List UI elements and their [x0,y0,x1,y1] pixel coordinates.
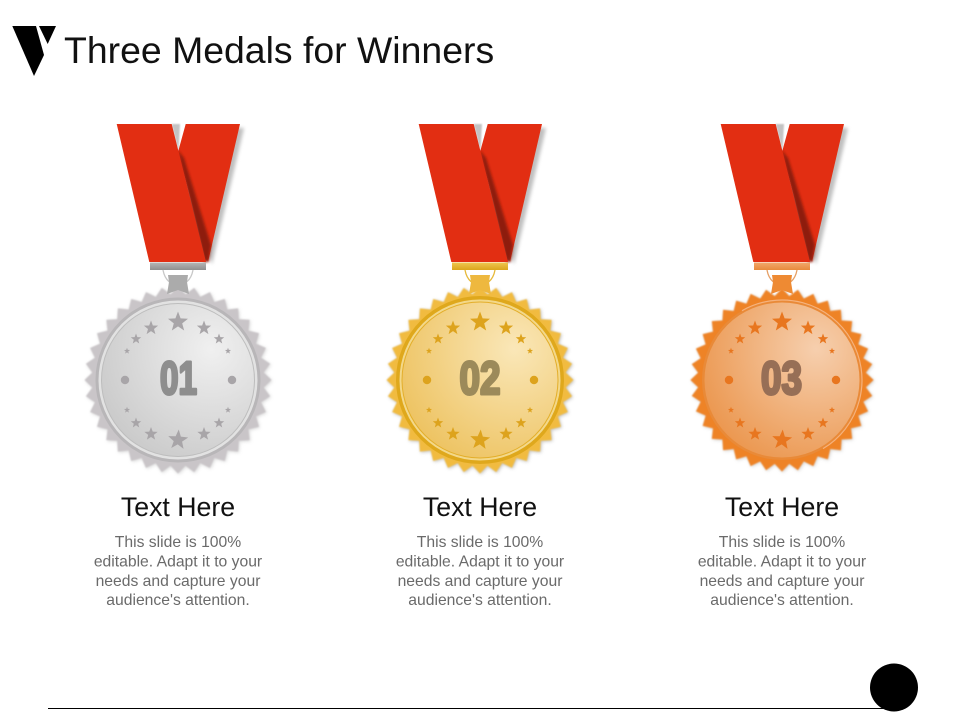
silver description: needs and capture your [96,573,260,590]
bronze description: audience's attention. [710,592,854,609]
panel: bronze medal [673,124,891,609]
bronze description: needs and capture your [700,573,864,590]
panel: silver medal [77,124,280,609]
gold heading: Text Here [423,492,537,522]
gold description: needs and capture your [398,573,562,590]
gold description [396,534,564,609]
silver description: editable. Adapt it to your [94,554,262,570]
silver description: This slide is 100% [115,534,241,551]
bronze clasp [754,262,810,294]
silver description [94,534,262,609]
bronze heading: Text Here [725,492,839,522]
bronze description: This slide is 100% [719,534,845,551]
footer circle [870,664,918,712]
gold description: editable. Adapt it to your [396,554,564,570]
logo [12,26,56,76]
bronze description [698,534,866,609]
bronze stars [725,312,840,449]
gold description: This slide is 100% [417,534,543,551]
bronze description: editable. Adapt it to your [698,554,866,570]
bronze ribbon [721,124,848,264]
gold clasp [452,262,508,294]
title: Three Medals for Winners [64,29,494,71]
silver description: audience's attention. [106,592,250,609]
silver stars [121,312,236,449]
number 02: 02 [460,352,500,404]
panel: gold medal [379,124,582,609]
silver clasp [150,262,206,294]
silver heading: Text Here [121,492,235,522]
gold stars [423,312,538,449]
number 01: 01 [160,352,197,404]
silver medal disc [77,279,280,482]
bronze medal disc [673,271,891,489]
silver ribbon [117,124,244,264]
number 03: 03 [761,352,802,404]
gold ribbon [419,124,546,264]
gold medal disc [379,279,582,482]
footer line [48,708,894,709]
gold description: audience's attention. [408,592,552,609]
